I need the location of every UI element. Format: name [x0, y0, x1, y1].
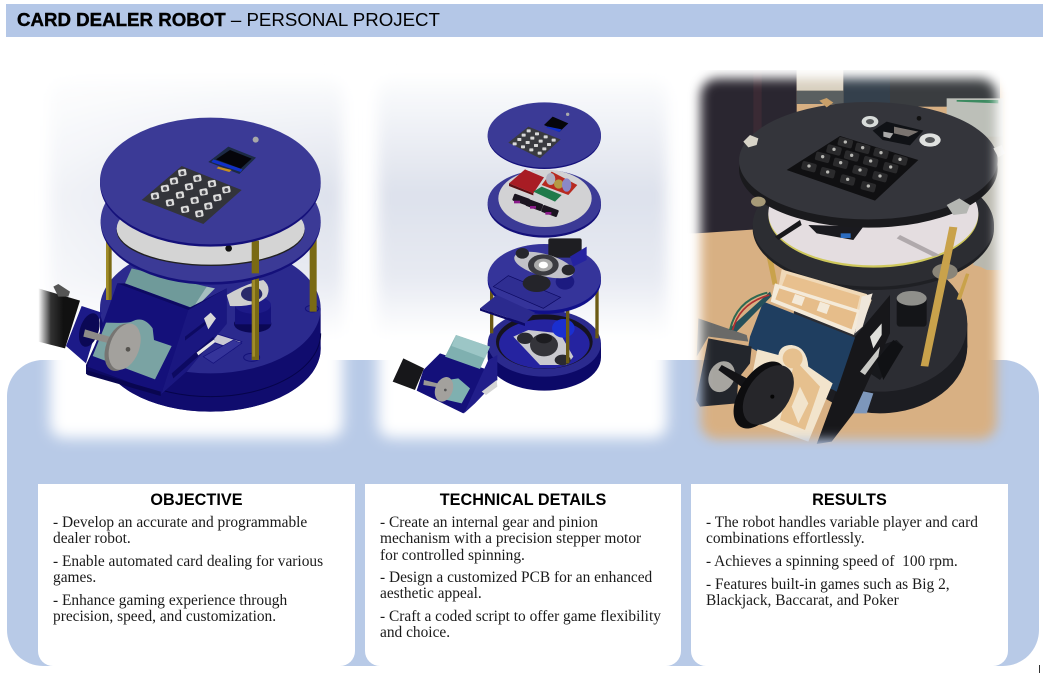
top disc [488, 102, 601, 169]
front brass rod [921, 227, 957, 367]
robot base [100, 243, 321, 412]
top disc [739, 98, 1005, 228]
motor mount [696, 293, 769, 407]
text: technical 3: - Craft a coded script to offer game flexibility [380, 608, 661, 625]
rubber wheel [734, 362, 794, 428]
card cartridge [86, 268, 227, 396]
feed wheel [83, 319, 147, 376]
panel: objective [38, 484, 355, 666]
text: technical 3: and choice. [380, 624, 450, 641]
panel: CAD assembly backdrop [50, 80, 343, 438]
stepper motor [38, 284, 104, 363]
text: results 2: - Achieves a spinning speed of 100 rpm. [706, 553, 958, 570]
panel: results [691, 484, 1008, 666]
photo background [692, 70, 1004, 447]
brass rods [767, 255, 969, 300]
lower gear ring [488, 310, 601, 391]
exposed card [752, 345, 833, 442]
text: objective 2: - Enable automated card dealing for various [53, 553, 323, 570]
text: objective 1: dealer robot. [53, 530, 131, 547]
text: objective 3: - Enhance gaming experience through [53, 592, 287, 609]
header bar [6, 4, 1043, 37]
photo of finished robot [692, 70, 1004, 447]
blue background panel [7, 360, 1039, 666]
text: objective 3 [53, 592, 287, 625]
text: objective 1: - Develop an accurate and programmable [53, 514, 307, 531]
heading: objective: OBJECTIVE [150, 491, 243, 509]
display and buttons [862, 116, 941, 147]
text: objective 2: games. [53, 569, 96, 586]
text: technical 2: aesthetic appeal. [380, 585, 482, 602]
playing cards in cartridge [771, 269, 873, 335]
small corner mark [1039, 665, 1040, 673]
text: results 1: - The robot handles variable player and card [706, 514, 978, 531]
title: CARD DEALER ROBOT – PERSONAL PROJECT [17, 9, 440, 30]
text: results 3: - Features built-in games such as Big 2, [706, 576, 950, 593]
third disc with tray [480, 238, 601, 326]
text: results 3: Blackjack, Baccarat, and Poker [706, 592, 899, 609]
second disc with electronics [488, 169, 601, 238]
heading: technical details: TECHNICAL DETAILS [440, 491, 606, 509]
text: technical 1: for controlled spinning. [380, 547, 525, 564]
text: results 1: combinations effortlessly. [706, 530, 865, 547]
detached cartridge [393, 335, 497, 413]
rods [490, 277, 599, 363]
heading: results: RESULTS [812, 491, 887, 509]
dealing module [729, 292, 903, 444]
text: results 1 [706, 514, 978, 547]
text: technical 1: - Create an internal gear and pinion [380, 514, 598, 531]
top disc [100, 118, 321, 247]
panel: exploded view backdrop [378, 80, 667, 438]
panel: technical details [365, 484, 681, 666]
keypad [787, 136, 918, 201]
text: technical 3 [380, 608, 661, 641]
exploded view robot [393, 102, 601, 413]
text: objective 2 [53, 553, 323, 586]
text: objective 1 [53, 514, 307, 547]
text: results 3 [706, 576, 950, 609]
CAD assembled robot [38, 118, 321, 412]
standoffs [106, 203, 317, 360]
text: objective 3: precision, speed, and customization. [53, 608, 276, 625]
text: technical 2 [380, 569, 652, 602]
text: technical 1: mechanism with a precision stepper motor [380, 530, 641, 547]
text: technical 1 [380, 514, 641, 564]
base [794, 280, 968, 414]
keypad [142, 166, 242, 224]
middle disc [752, 198, 994, 290]
text: technical 2: - Design a customized PCB for an enhanced [380, 569, 652, 586]
OLED display [208, 147, 256, 174]
middle disc [101, 159, 321, 285]
